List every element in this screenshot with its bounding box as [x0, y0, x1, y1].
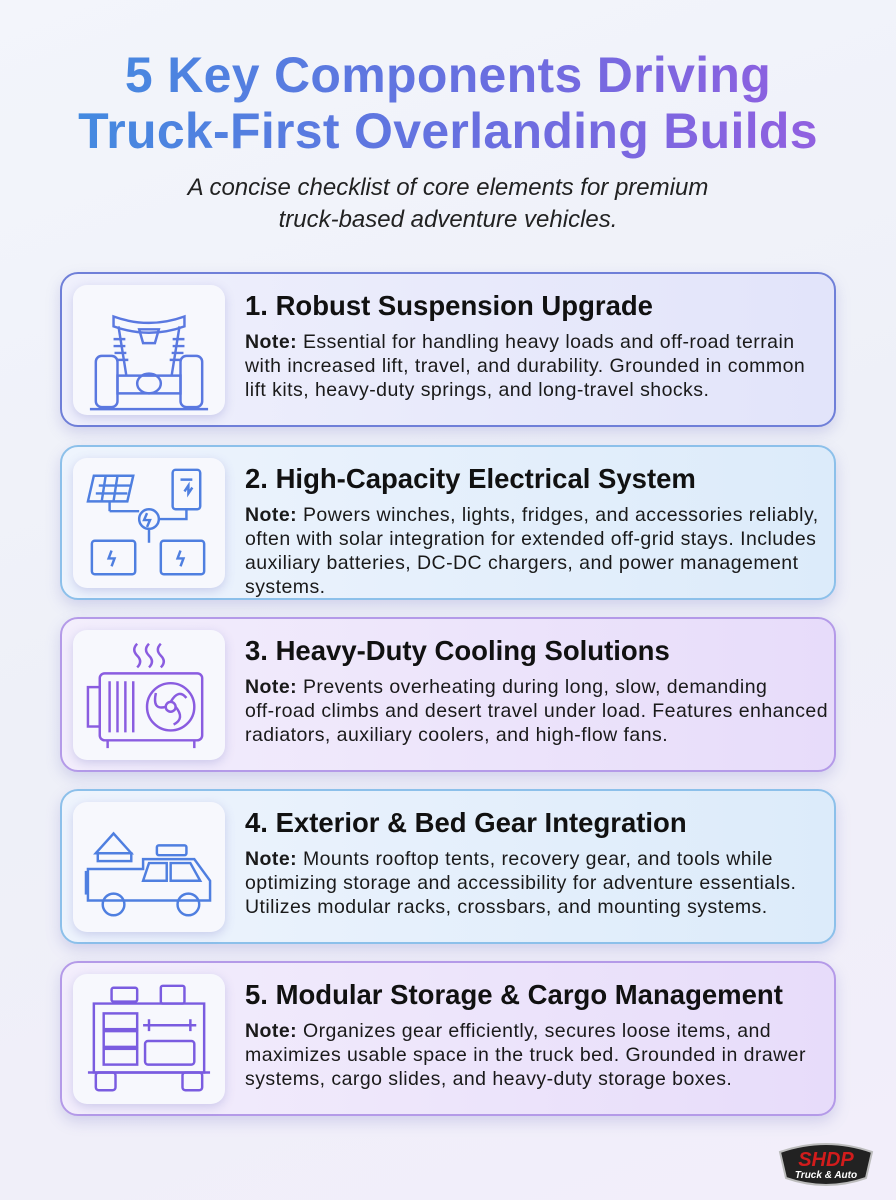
- subtitle: [186, 174, 708, 233]
- heading: 5. Modular Storage & Cargo Management: [245, 979, 783, 1010]
- heading: 2. High-Capacity Electrical System: [245, 463, 696, 494]
- icon: storage: [73, 974, 225, 1104]
- panel: storage: [60, 961, 836, 1116]
- title: 5 Key Components Driving: [125, 47, 771, 103]
- text: Note: Prevents overheating during long, slow, demanding off-road climbs and desert travel under load. Features enhanced radiators, auxiliary coolers, and high-flow fans.: [245, 676, 828, 746]
- text: Note: Essential for handling heavy loads and off-road terrain with increased lift, travel, and durability. Grounded in common lift kits, heavy-duty springs, and long-travel shocks.: [245, 331, 805, 401]
- logo: [778, 1143, 874, 1186]
- title: [0, 47, 896, 159]
- icon: suspension: [73, 285, 225, 415]
- text: Note: Organizes gear efficiently, secures loose items, and maximizes usable space in the truck bed. Grounded in drawer systems, cargo slides, and heavy-duty storage boxes.: [245, 1020, 806, 1090]
- panel: electrical: [60, 445, 836, 600]
- panel: exterior: [60, 789, 836, 944]
- text: Note: Powers winches, lights, fridges, and accessories reliably, often with solar integration for extended off-grid stays. Includes auxiliary batteries, DC-DC chargers, and power management systems.: [245, 504, 819, 598]
- panel: cooling: [60, 617, 836, 772]
- panel: suspension: [60, 272, 836, 427]
- heading: 1. Robust Suspension Upgrade: [245, 290, 653, 321]
- heading: 3. Heavy-Duty Cooling Solutions: [245, 635, 670, 666]
- text: Note: Mounts rooftop tents, recovery gear, and tools while optimizing storage and accessibility for adventure essentials. Utilizes modular racks, crossbars, and mounting systems.: [245, 848, 796, 918]
- icon: truck with tent: [73, 802, 225, 932]
- title: Truck-First Overlanding Builds: [78, 103, 818, 159]
- heading: 4. Exterior & Bed Gear Integration: [245, 807, 687, 838]
- logo: SHDP: [798, 1149, 854, 1171]
- logo: Truck & Auto: [795, 1170, 857, 1181]
- icon: cooling: [73, 630, 225, 760]
- subtitle: A concise checklist of core elements for premium: [188, 174, 708, 201]
- subtitle: truck-based adventure vehicles.: [279, 206, 617, 233]
- icon: electrical: [73, 458, 225, 588]
